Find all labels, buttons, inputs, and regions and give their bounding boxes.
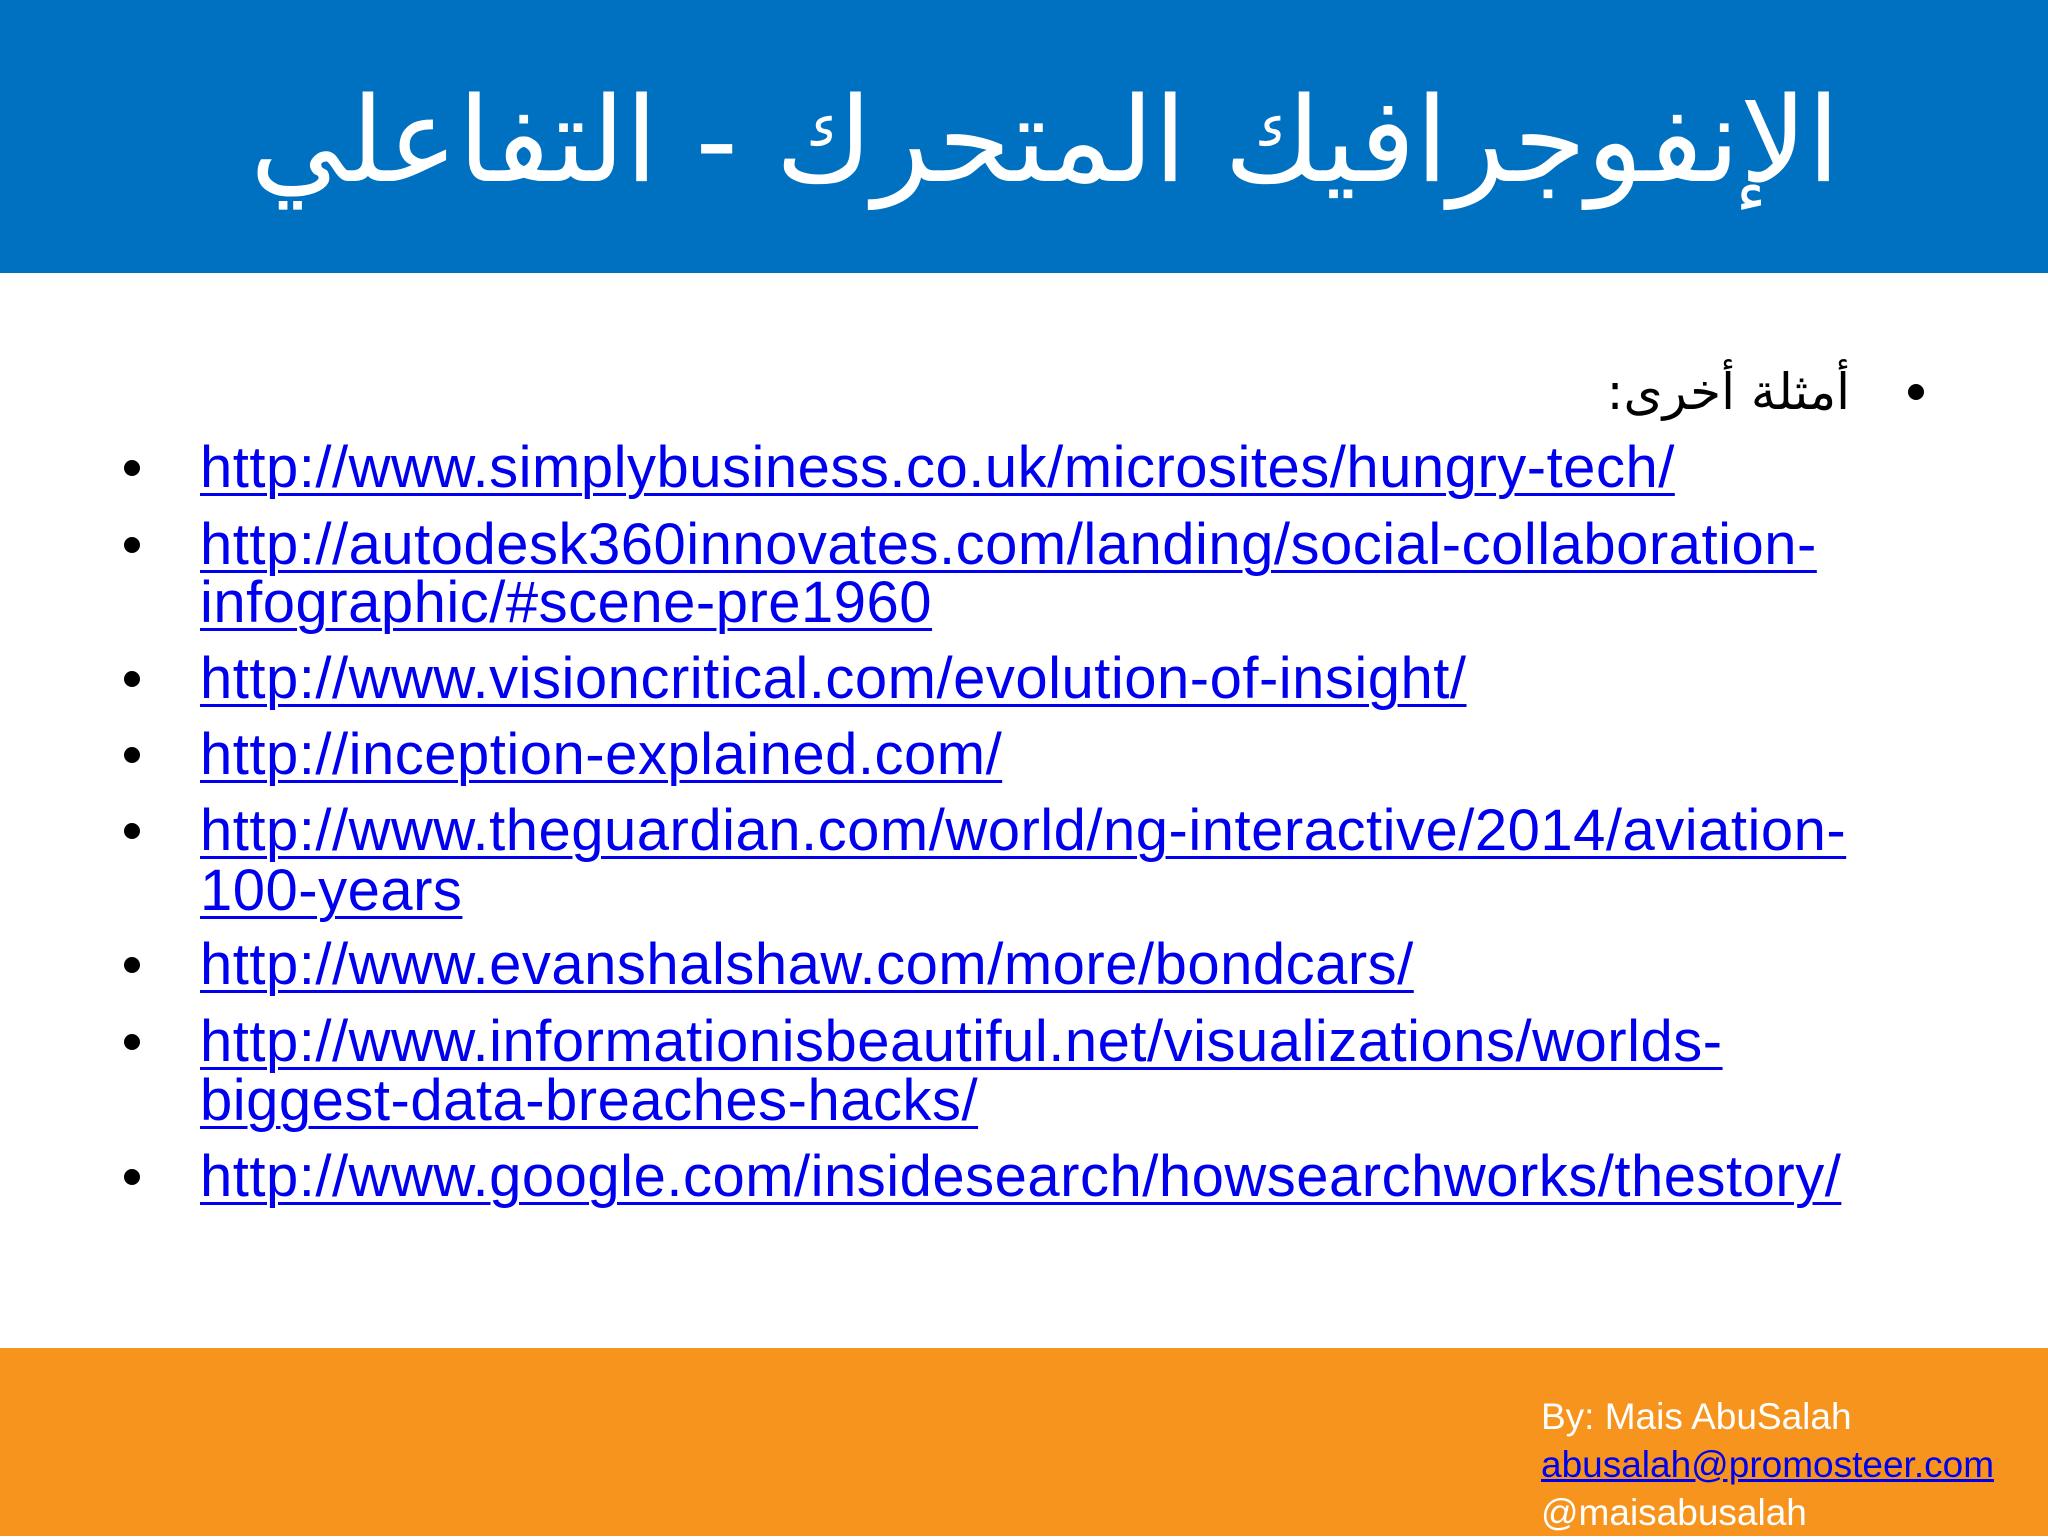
link list: http://autodesk360innovates.com/landing/social-collaboration- xyxy=(200,512,1817,577)
link list: http://inception-explained.com/ xyxy=(200,722,1002,787)
link list: infographic/#scene-pre1960 xyxy=(200,570,932,635)
header bar xyxy=(0,0,2048,273)
link list: http://www.informationisbeautiful.net/visualizations/worlds- xyxy=(200,1009,1723,1074)
footer bar xyxy=(0,1348,2048,1536)
link list: http://www.visioncritical.com/evolution-of-insight/ xyxy=(200,646,1467,711)
title: الإنفوجرافيك المتحرك - التفاعلي xyxy=(250,71,1840,209)
link list: http://www.theguardian.com/world/ng-interactive/2014/aviation- xyxy=(200,798,1846,863)
arabic bullet heading: أمثلة أخرى: xyxy=(1607,363,1850,421)
author credits xyxy=(1541,1396,1994,1533)
author credits: @maisabusalah xyxy=(1541,1492,1807,1533)
link list: http://www.google.com/insidesearch/howsearchworks/thestory/ xyxy=(200,1144,1841,1209)
author credits: abusalah@promosteer.com xyxy=(1541,1444,1994,1485)
author credits: By: Mais AbuSalah xyxy=(1541,1396,1852,1437)
bullet dot arabic xyxy=(1908,384,1924,400)
link list xyxy=(124,435,1846,1209)
link list: 100-years xyxy=(200,858,462,923)
link list: http://www.evanshalshaw.com/more/bondcars/ xyxy=(200,932,1414,997)
link list: http://www.simplybusiness.co.uk/microsites/hungry-tech/ xyxy=(200,435,1675,500)
link list: biggest-data-breaches-hacks/ xyxy=(200,1068,978,1133)
